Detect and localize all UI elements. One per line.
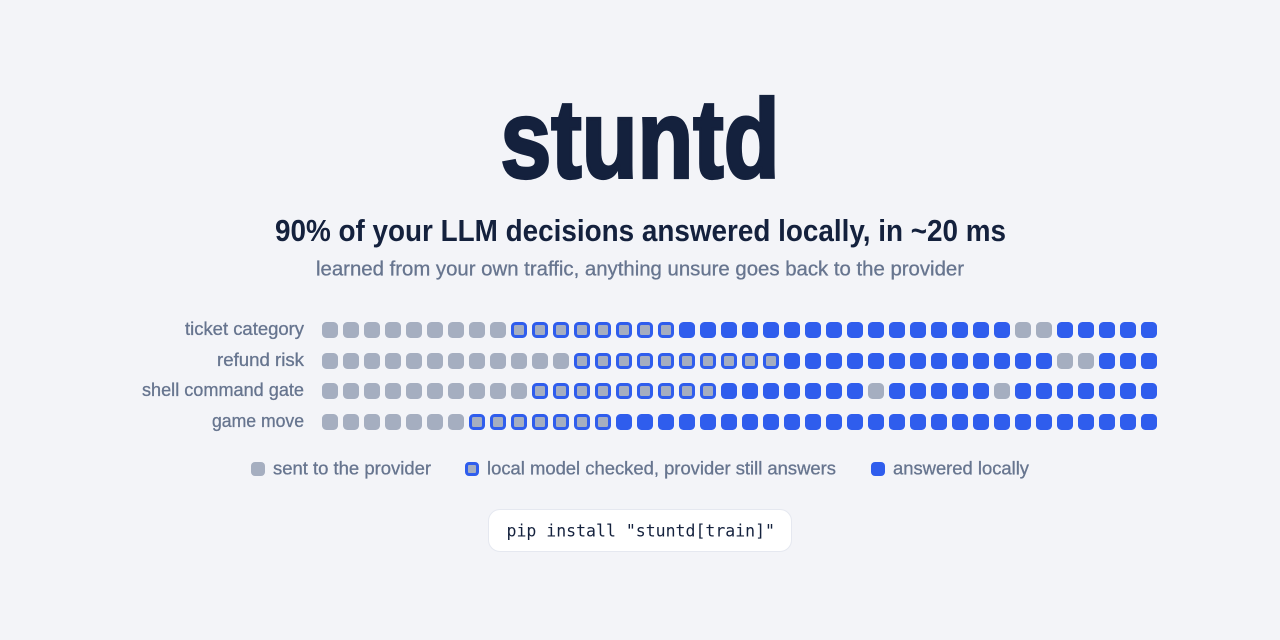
subtitle: learned from your own traffic, anything unsure goes back to the provider bbox=[316, 258, 964, 280]
install command box: pip install "stuntd[train]" bbox=[506, 522, 774, 542]
row label: game move: game move bbox=[212, 410, 304, 430]
row label: ticket category: ticket category bbox=[185, 319, 304, 339]
row cells: game move bbox=[322, 414, 1157, 430]
install command box bbox=[488, 509, 792, 552]
row label: refund risk: refund risk bbox=[217, 350, 305, 370]
legend swatch: local model checked bbox=[465, 462, 479, 476]
headline: 90% of your LLM decisions answered locally, in ~20 ms bbox=[275, 214, 1006, 248]
row cells: refund risk bbox=[322, 353, 1157, 369]
row label: shell command gate: shell command gate bbox=[142, 380, 304, 400]
row cells: shell command gate bbox=[322, 383, 1157, 399]
row cells: ticket category bbox=[322, 322, 1157, 338]
legend text: answered locally: answered locally bbox=[893, 458, 1029, 478]
legend text: local model checked: local model checked, provider still answers bbox=[487, 458, 836, 478]
legend text: sent to the provider: sent to the provider bbox=[273, 458, 431, 478]
legend swatch: sent to the provider bbox=[251, 462, 265, 476]
legend swatch: answered locally bbox=[871, 462, 885, 476]
title: stuntd bbox=[500, 78, 780, 202]
